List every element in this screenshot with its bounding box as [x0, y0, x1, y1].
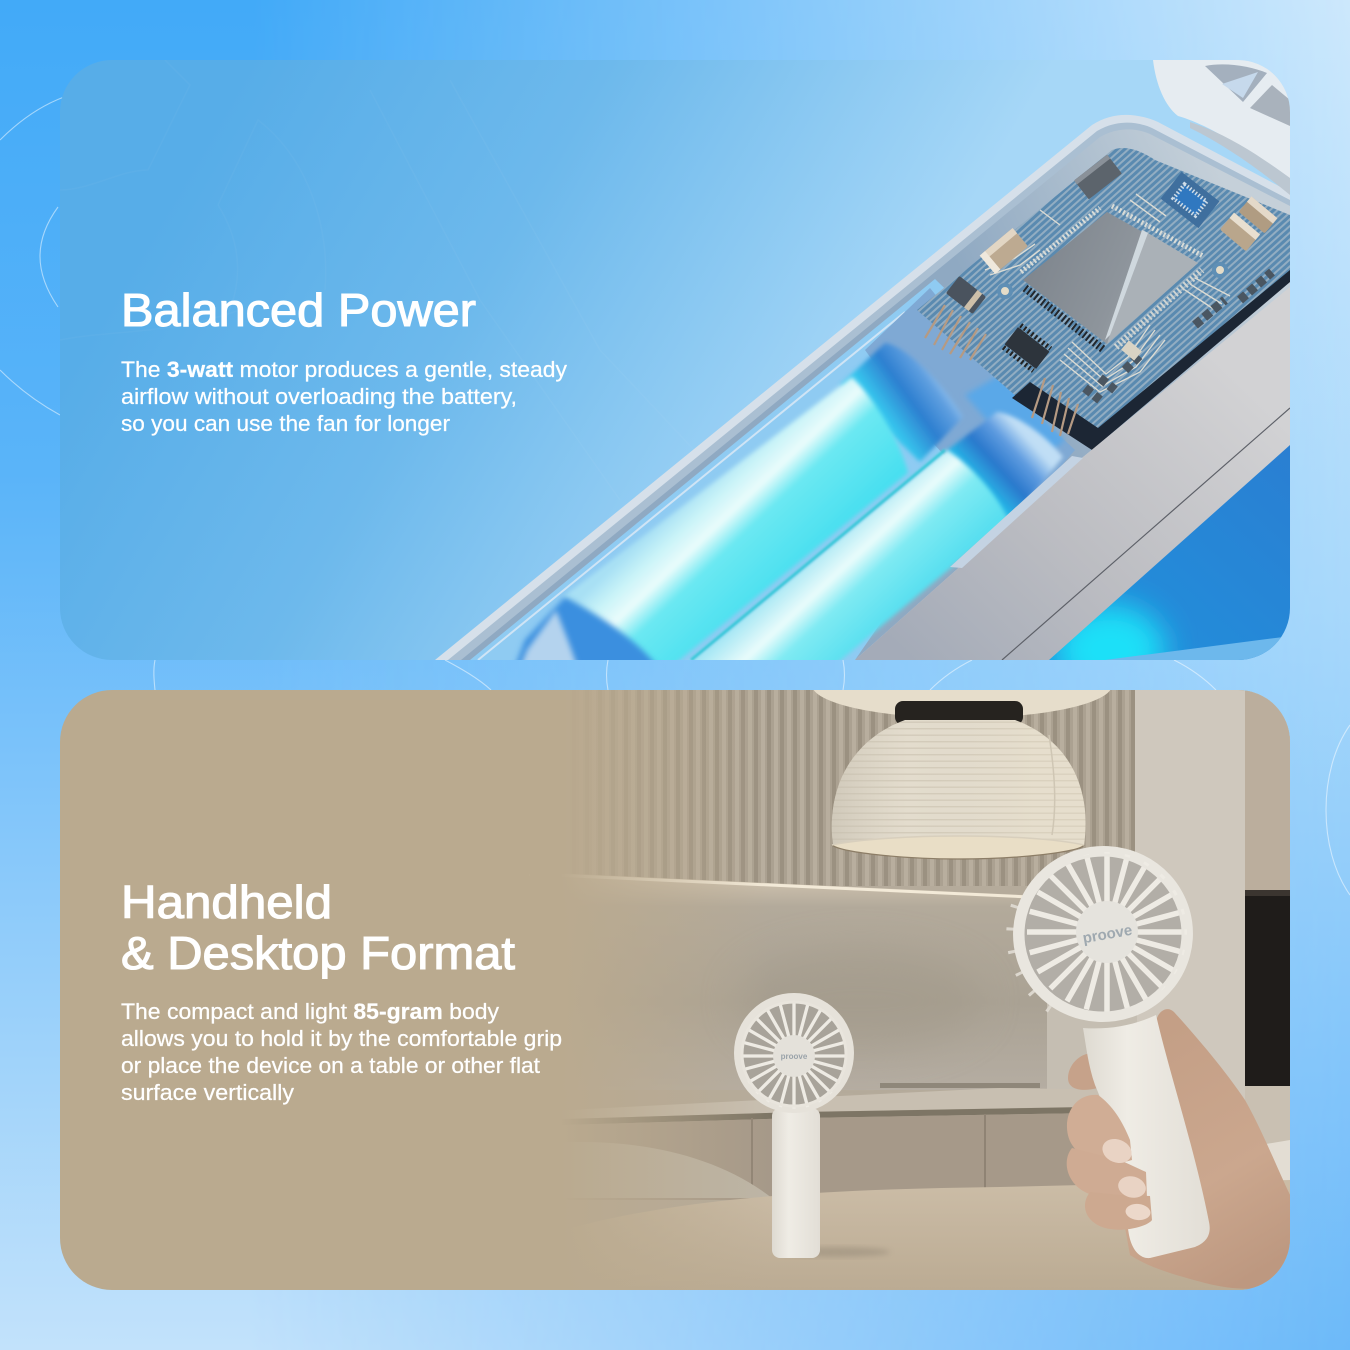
blue surface with cyan glow: [1040, 440, 1291, 695]
heading: Handheld and Desktop Format: Handheld: [121, 876, 332, 928]
chair back: [530, 1142, 772, 1198]
backsplash: [530, 872, 1047, 1090]
battery two body: [655, 450, 1008, 690]
table: [530, 1180, 1290, 1290]
text block: battery description: [121, 357, 567, 436]
panel: handheld and desktop format: [60, 690, 1290, 1290]
brand label: proove: [1081, 922, 1134, 947]
pendant lamp: [812, 652, 1112, 859]
panel: balanced power: [60, 60, 1290, 660]
microchip: [1021, 206, 1203, 350]
battery two cap: [945, 412, 1063, 522]
circuit board: [917, 148, 1290, 450]
back finger: [1068, 1053, 1098, 1090]
fade of photo into beige panel: [530, 690, 770, 1290]
palm: [1120, 1009, 1291, 1289]
battery end cap: [510, 597, 670, 680]
icon: fan head at top of device: [1153, 60, 1290, 195]
counter and cabinets: [530, 1088, 1135, 1120]
text block: format description: The compact and light 85-gram body: [121, 999, 499, 1024]
batteries: [510, 343, 1063, 690]
heading: Handheld and Desktop Format: [121, 876, 515, 979]
brand label: proove: [781, 1052, 808, 1061]
icon: hand holding fan: [1067, 1009, 1291, 1289]
icon: handheld fan head: [1002, 834, 1204, 1034]
slatted wall: [530, 690, 1136, 886]
battery one cap: [840, 343, 963, 462]
fan head: [734, 993, 854, 1113]
device body with transparent shell: [435, 115, 1290, 660]
text block: battery description: airflow without overloading the battery,: [121, 384, 517, 409]
shadow on table: [780, 1247, 890, 1257]
heading: Balanced Power: Balanced Power: [121, 284, 476, 336]
wire bundles: [925, 305, 1078, 436]
heading: Handheld and Desktop Format: & Desktop Format: [121, 927, 515, 979]
battery one body: [563, 377, 908, 690]
text block: battery description: so you can use the fan for longer: [121, 411, 450, 436]
oven: [1245, 890, 1290, 1086]
fan handle: [772, 1108, 820, 1258]
text block: battery description: The 3-watt motor produces a gentle, steady: [121, 357, 567, 382]
text block: format description: surface vertically: [121, 1080, 294, 1105]
faint fan watermark: [60, 60, 760, 520]
connector flange: [1012, 270, 1290, 450]
text block: format description: allows you to hold it by the comfortable grip: [121, 1026, 562, 1051]
device side panel: [855, 287, 1290, 660]
small integrated circuits: [999, 155, 1272, 400]
right wall: [1135, 690, 1290, 1140]
fingers: [1067, 1095, 1132, 1166]
icon: desktop fan standing: [734, 993, 890, 1258]
text block: format description: [121, 999, 562, 1105]
kitchen photo background: [530, 690, 1290, 1290]
copper traces: [985, 194, 1230, 392]
glowing shelf line: [530, 874, 1030, 897]
text block: format description: or place the device on a table or other flat: [121, 1053, 540, 1078]
handle: [1083, 1015, 1210, 1258]
capacitors: [946, 196, 1277, 314]
